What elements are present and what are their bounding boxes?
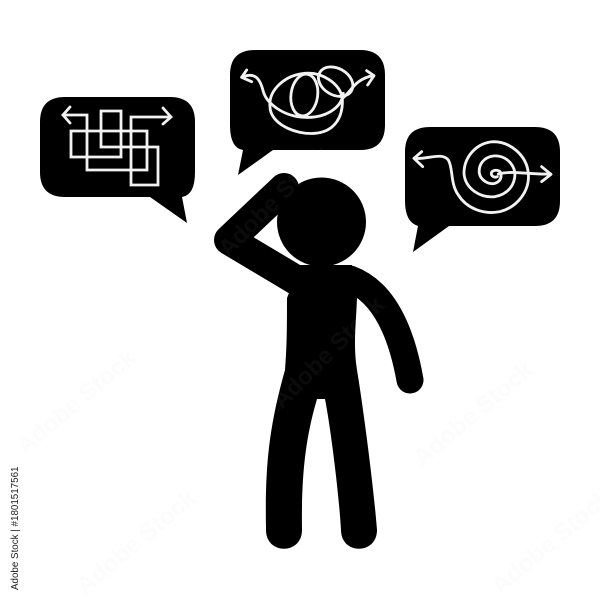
- bubble shape right: [405, 127, 560, 252]
- torso and legs: [266, 265, 377, 549]
- confused person figure: [229, 178, 410, 549]
- icon: tangled line with arrows: [242, 61, 374, 133]
- speech bubble: tangled maze of rectangles: [40, 97, 195, 223]
- speech bubble: spiral: [405, 127, 560, 252]
- watermark on light background: Adobe Stock: [12, 344, 142, 460]
- watermark on black shapes: [213, 139, 390, 414]
- watermark on light background: [12, 344, 600, 600]
- lowered arm: [350, 279, 410, 380]
- bubble shape left: [40, 97, 195, 223]
- speech bubble: scribbled loops: [230, 50, 385, 175]
- watermark on black shapes: Adobe Stock: [213, 139, 336, 262]
- head: [277, 178, 366, 266]
- stock credit: Adobe Stock | #1801517561: [10, 467, 21, 590]
- raised arm scratching head: [229, 188, 296, 280]
- watermark on black shapes: Adobe Stock: [267, 291, 390, 414]
- icon: rectangular maze with arrows: [63, 107, 171, 185]
- watermark on light background: Adobe Stock: [409, 356, 539, 472]
- bubble shape top: [230, 50, 385, 175]
- icon: spiral line with arrows: [414, 142, 551, 213]
- watermark on light background: Adobe Stock: [72, 484, 202, 600]
